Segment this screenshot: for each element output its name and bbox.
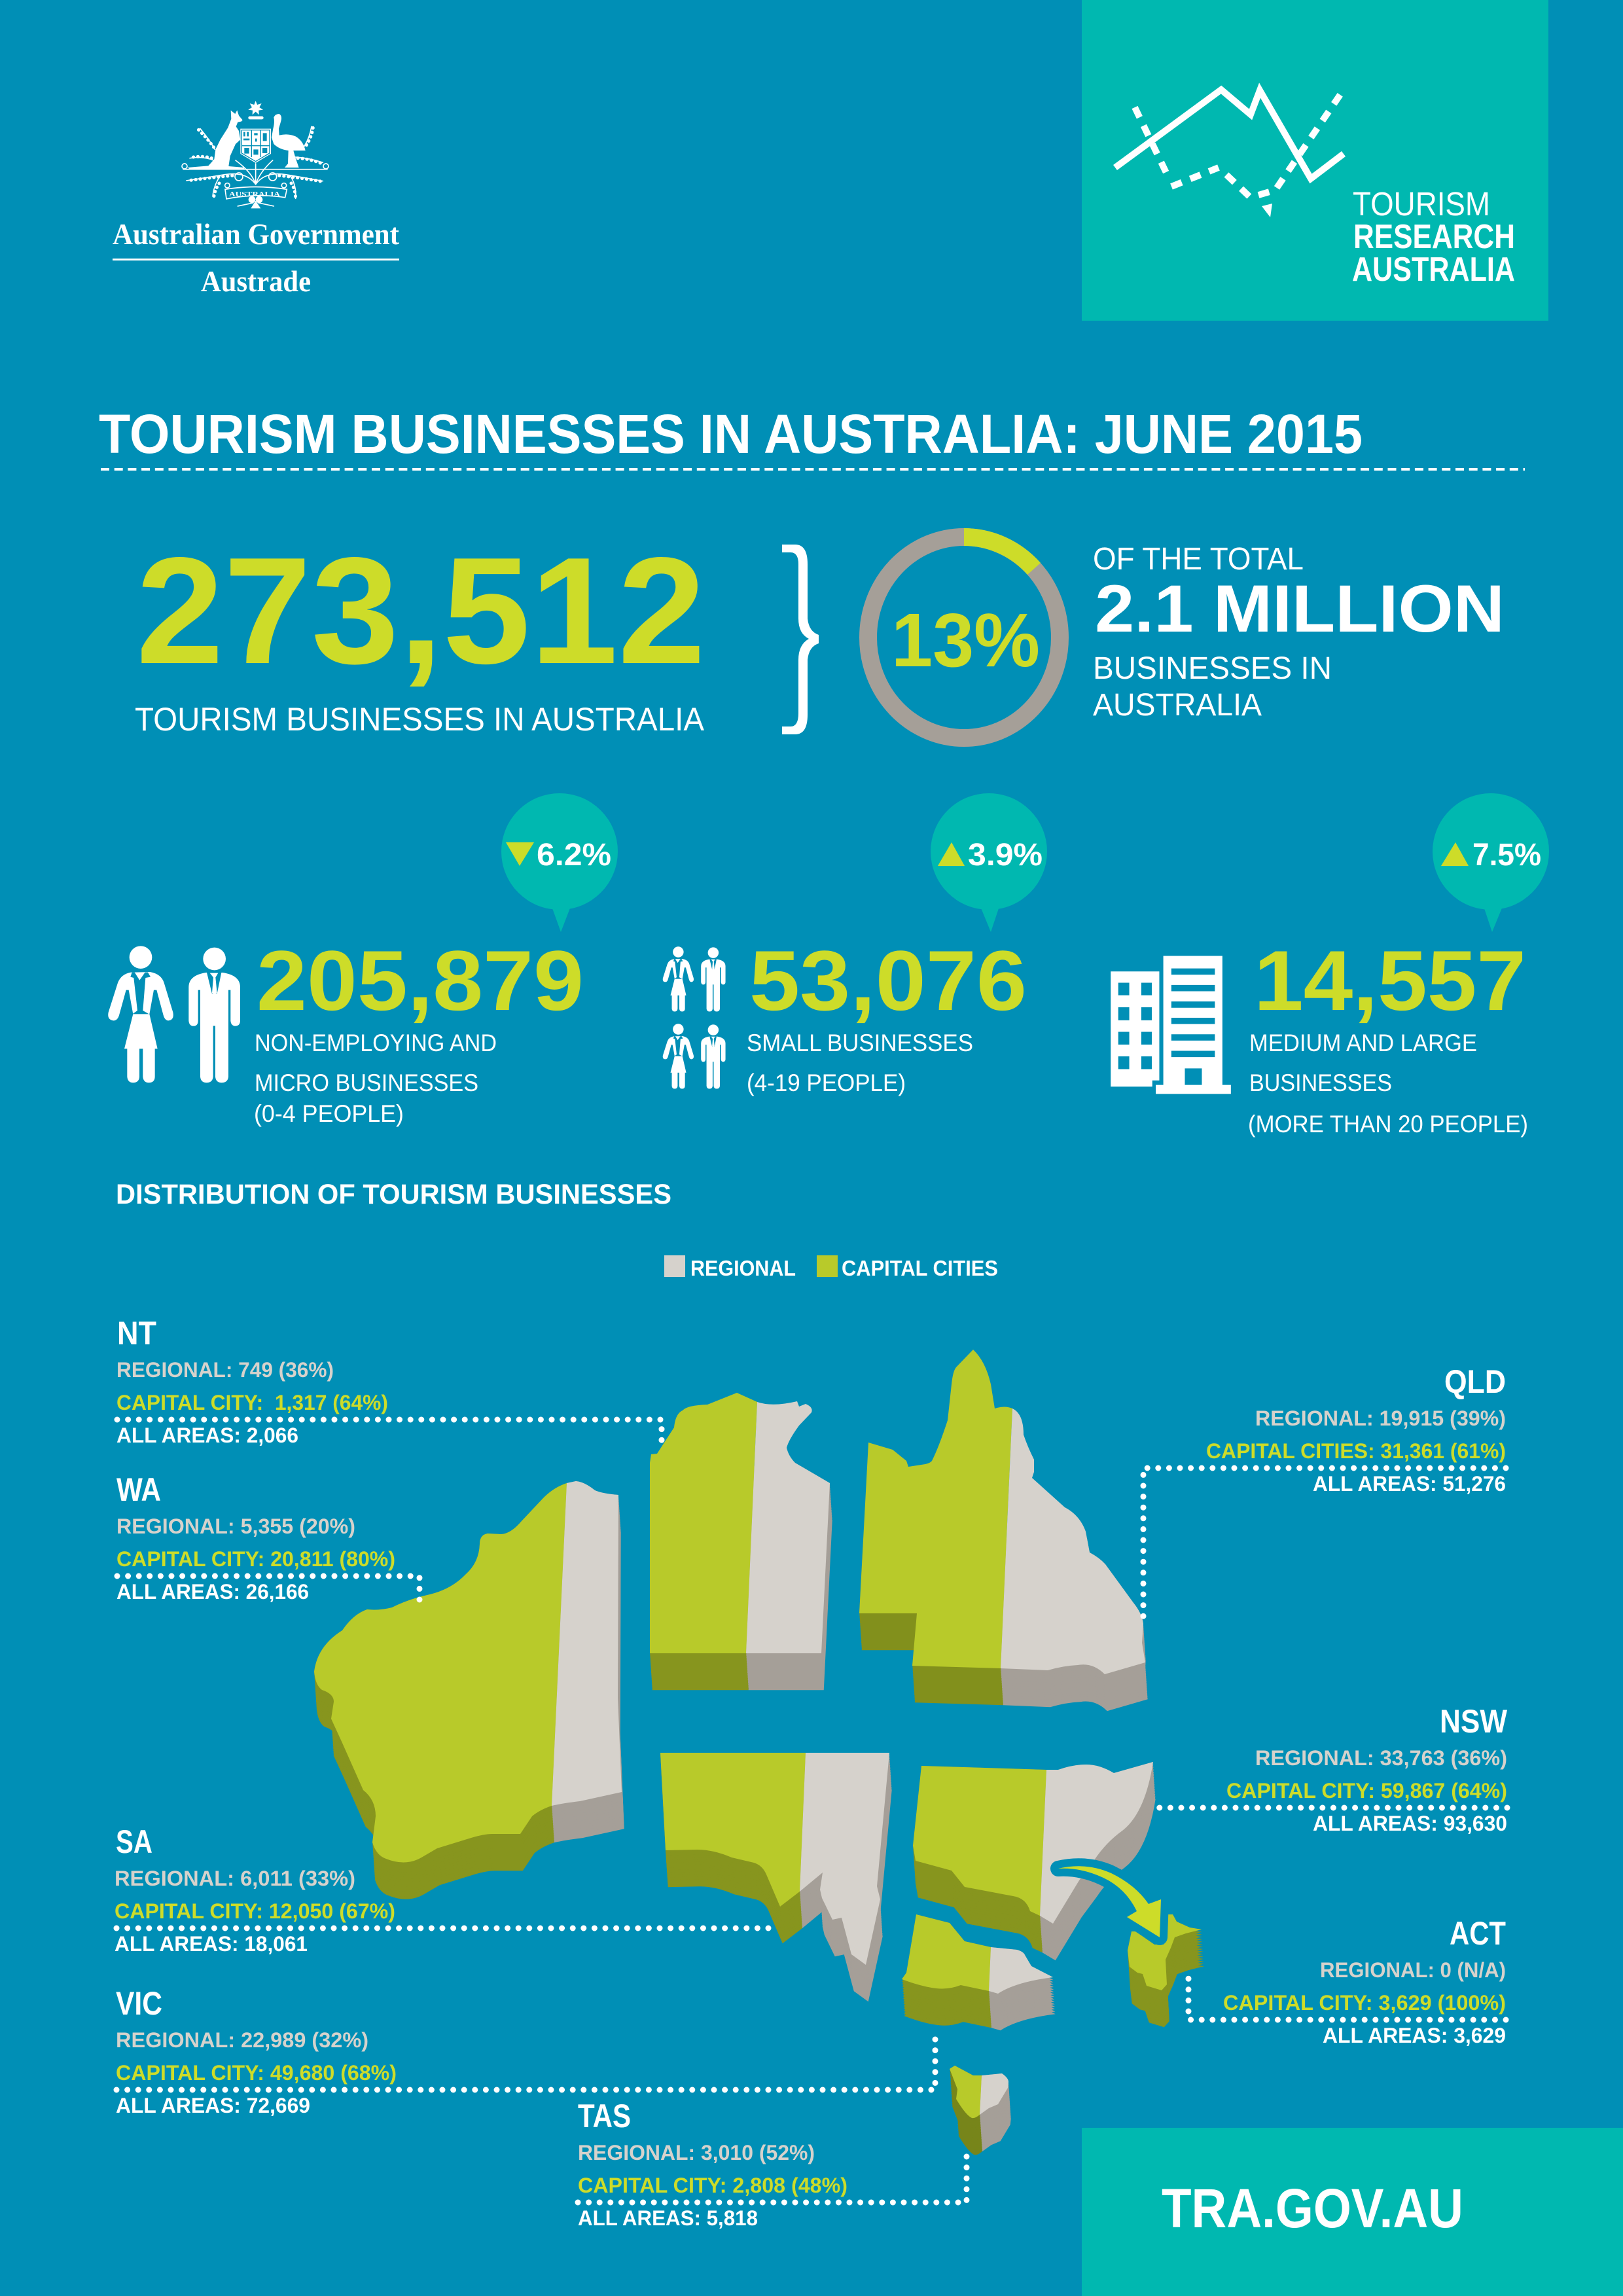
panel: Tourism Research Australia logo bbox=[1082, 0, 1548, 321]
panel: NT figures: CAPITAL CITY: 1,317 (64%) bbox=[116, 1391, 388, 1414]
panel: SA figures: CAPITAL CITY: 12,050 (67%) bbox=[115, 1899, 395, 1923]
icon: office buildings bbox=[1111, 956, 1231, 1094]
panel: SA figures: REGIONAL: 6,011 (33%) bbox=[115, 1867, 355, 1890]
callout: down 6.2%: 6.2% bbox=[537, 838, 611, 872]
panel: WA figures: REGIONAL: 5,355 (20%) bbox=[116, 1515, 355, 1538]
state: QLD bbox=[859, 1350, 1148, 1711]
panel: NT figures: ALL AREAS: 2,066 bbox=[116, 1424, 298, 1447]
label: (0-4 PEOPLE) bbox=[254, 1100, 404, 1127]
panel: QLD figures: ALL AREAS: 51,276 bbox=[1313, 1472, 1506, 1496]
state: SA bbox=[660, 1753, 892, 2001]
panel: NT figures: NT bbox=[117, 1315, 156, 1352]
logo rule bbox=[113, 259, 399, 260]
panel: NSW figures: REGIONAL: 33,763 (36%) bbox=[1255, 1746, 1507, 1770]
panel: NT figures bbox=[116, 1315, 388, 1447]
label: (MORE THAN 20 PEOPLE) bbox=[1248, 1111, 1528, 1138]
panel: NSW figures: NSW bbox=[1440, 1703, 1508, 1740]
panel: NSW figures: ALL AREAS: 93,630 bbox=[1313, 1812, 1507, 1835]
text: of the total 2.1 million bbox=[1093, 542, 1505, 723]
legend bbox=[664, 1255, 998, 1280]
legend: capital cities: CAPITAL CITIES bbox=[842, 1256, 998, 1280]
panel: NSW figures bbox=[1226, 1703, 1508, 1835]
icon: four people bbox=[663, 946, 726, 1089]
state: TAS bbox=[950, 2066, 1011, 2155]
number: 14,557: 14,557 bbox=[1254, 933, 1526, 1028]
panel: VIC figures: ALL AREAS: 72,669 bbox=[116, 2094, 310, 2117]
panel: TAS figures: TAS bbox=[578, 2098, 631, 2134]
number: 53,076: 53,076 bbox=[749, 933, 1027, 1028]
panel: TAS figures: REGIONAL: 3,010 (52%) bbox=[578, 2141, 815, 2164]
title: TOURISM BUSINESSES IN AUSTRALIA: JUNE 2015 bbox=[99, 403, 1363, 465]
panel: VIC figures bbox=[116, 1985, 397, 2117]
icon: brace bbox=[782, 545, 819, 734]
logo: Australian Government Austrade bbox=[113, 101, 399, 298]
icon: coat of arms bbox=[182, 101, 329, 208]
panel: ACT figures: CAPITAL CITY: 3,629 (100%) bbox=[1223, 1991, 1506, 2015]
panel: website footer: TRA.GOV.AU bbox=[1162, 2178, 1463, 2239]
RESEARCH wordmark: RESEARCH bbox=[1353, 218, 1515, 256]
Australian Government wordmark: Australian Government bbox=[113, 218, 399, 251]
crest ribbon text: AUSTRALIA bbox=[229, 191, 281, 198]
icon: line mark bbox=[1115, 90, 1344, 198]
legend: regional: REGIONAL bbox=[690, 1256, 796, 1280]
text: tourism businesses in Australia: TOURISM BUSINESSES IN AUSTRALIA bbox=[135, 701, 705, 738]
TOURISM wordmark: TOURISM bbox=[1353, 185, 1490, 223]
panel: VIC figures: REGIONAL: 22,989 (32%) bbox=[116, 2028, 368, 2052]
panel: VIC figures: CAPITAL CITY: 49,680 (68%) bbox=[116, 2061, 397, 2085]
number: 205,879: 205,879 bbox=[257, 933, 584, 1028]
panel: ACT figures: ACT bbox=[1450, 1915, 1506, 1952]
state: VIC bbox=[902, 1914, 1056, 2030]
panel: SA figures: ALL AREAS: 18,061 bbox=[115, 1932, 308, 1956]
panel: medium and large businesses bbox=[1111, 793, 1549, 1138]
panel: VIC figures: VIC bbox=[116, 1985, 162, 2022]
state: ACT bbox=[1128, 1914, 1204, 2027]
chart: 13% donut bbox=[868, 537, 1060, 738]
icon: dashed line arrow tip bbox=[1262, 204, 1272, 217]
panel: WA figures: CAPITAL CITY: 20,811 (80%) bbox=[116, 1547, 395, 1571]
panel: website footer bbox=[1082, 2128, 1623, 2296]
donut remainder ring bbox=[868, 537, 1060, 738]
panel: TAS figures: CAPITAL CITY: 2,808 (48%) bbox=[578, 2174, 847, 2197]
text: of the total 2.1 million: BUSINESSES IN bbox=[1093, 651, 1332, 686]
panel: ACT figures: ALL AREAS: 3,629 bbox=[1323, 2024, 1506, 2047]
panel: NSW figures: CAPITAL CITY: 59,867 (64%) bbox=[1226, 1779, 1507, 1803]
state: NSW bbox=[913, 1762, 1156, 1960]
panel: non-employing and micro businesses bbox=[108, 793, 618, 1127]
map of Australia bbox=[314, 1350, 1204, 2155]
label bbox=[747, 1030, 973, 1096]
callout: up 3.9%: 3.9% bbox=[968, 838, 1043, 872]
Austrade wordmark: Austrade bbox=[201, 265, 311, 298]
label: MEDIUM AND LARGE bbox=[1249, 1030, 1477, 1056]
text: of the total 2.1 million: AUSTRALIA bbox=[1093, 688, 1262, 723]
label: SMALL BUSINESSES bbox=[747, 1030, 973, 1056]
label: BUSINESSES bbox=[1249, 1069, 1392, 1096]
state: WA bbox=[314, 1481, 624, 1899]
heading: distribution of tourism businesses: DISTRIBUTION OF TOURISM BUSINESSES bbox=[116, 1179, 671, 1210]
panel: ACT figures: REGIONAL: 0 (N/A) bbox=[1320, 1958, 1506, 1982]
panel: TAS figures bbox=[578, 2098, 847, 2230]
panel: QLD figures: QLD bbox=[1444, 1363, 1506, 1400]
panel: WA figures: ALL AREAS: 26,166 bbox=[116, 1580, 309, 1604]
icon: two people bbox=[108, 946, 240, 1083]
state: NT bbox=[650, 1393, 832, 1690]
text: of the total 2.1 million: OF THE TOTAL bbox=[1093, 542, 1304, 577]
label bbox=[254, 1030, 497, 1127]
panel: QLD figures bbox=[1206, 1363, 1506, 1496]
panel: QLD figures: CAPITAL CITIES: 31,361 (61%) bbox=[1206, 1439, 1506, 1463]
callout: up 7.5%: 7.5% bbox=[1472, 838, 1541, 872]
callout: up 7.5% bbox=[1433, 793, 1549, 932]
callout: up 3.9% bbox=[931, 793, 1047, 932]
donut 13% arc bbox=[964, 537, 1034, 569]
panel: TAS figures: ALL AREAS: 5,818 bbox=[578, 2206, 758, 2230]
text: of the total 2.1 million: 2.1 MILLION bbox=[1095, 571, 1505, 646]
dotted leader lines bbox=[116, 1420, 1507, 2202]
panel: small businesses bbox=[663, 793, 1047, 1096]
logo background bbox=[1082, 0, 1548, 321]
panel: SA figures: SA bbox=[116, 1823, 152, 1860]
panel: QLD figures: REGIONAL: 19,915 (39%) bbox=[1255, 1407, 1506, 1430]
arrow: NSW to ACT bbox=[1058, 1866, 1161, 1937]
panel: WA figures: WA bbox=[116, 1471, 161, 1508]
donut value: 13% bbox=[891, 598, 1040, 683]
AUSTRALIA wordmark: AUSTRALIA bbox=[1352, 251, 1515, 289]
label bbox=[1248, 1030, 1528, 1138]
label: NON-EMPLOYING AND bbox=[255, 1030, 497, 1056]
big number: 273,512: 273,512 bbox=[136, 526, 705, 696]
label: (4-19 PEOPLE) bbox=[747, 1069, 906, 1096]
callout: down 6.2% bbox=[501, 793, 618, 932]
panel: ACT figures bbox=[1223, 1915, 1506, 2047]
panel: NT figures: REGIONAL: 749 (36%) bbox=[116, 1358, 334, 1382]
panel: WA figures bbox=[116, 1471, 395, 1604]
panel: SA figures bbox=[115, 1823, 395, 1956]
label: MICRO BUSINESSES bbox=[255, 1069, 478, 1096]
